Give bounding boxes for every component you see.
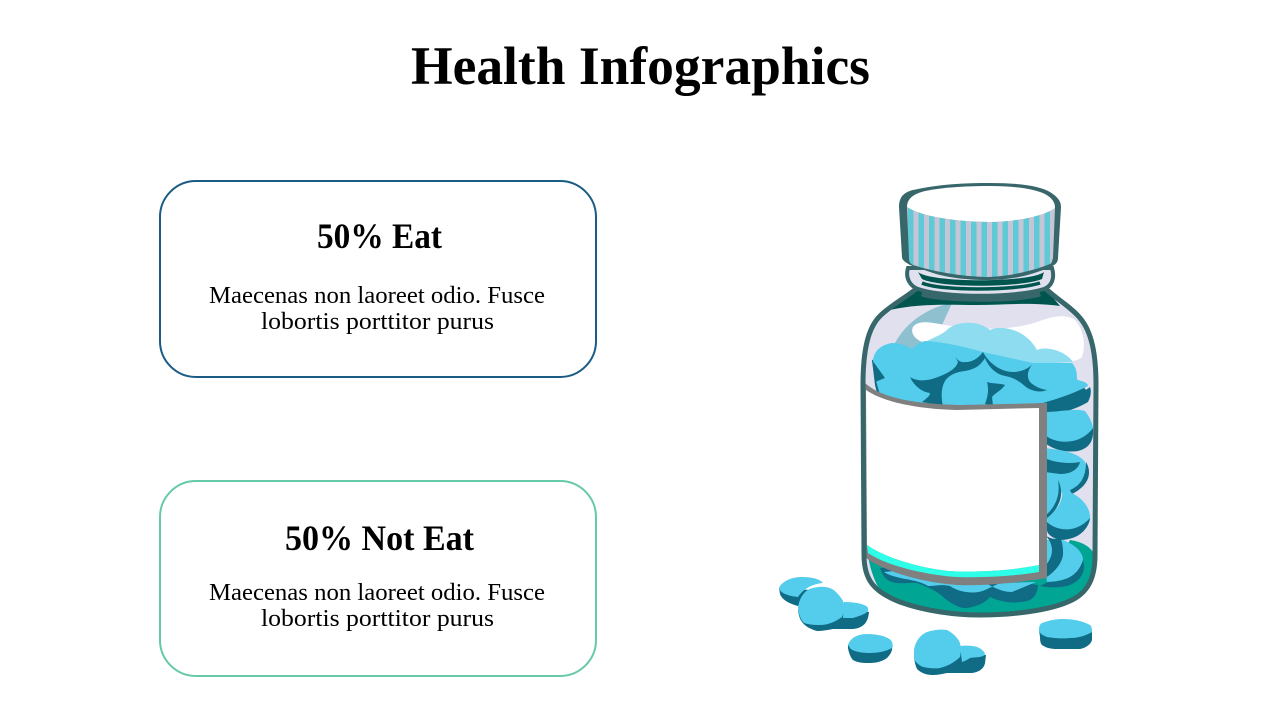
- text block: Eat description: [209, 283, 545, 335]
- text block: Eat description: lobortis porttitor purus: [261, 309, 494, 335]
- text block: Not Eat description: lobortis porttitor purus: [261, 606, 494, 632]
- bottle outline: [863, 289, 1096, 615]
- neck shoulder: [890, 288, 1060, 310]
- text block: Not Eat description: [209, 580, 545, 632]
- neck ring: [907, 268, 1053, 296]
- bottle contents: [866, 303, 1094, 615]
- panel: 50% Not Eat: [160, 481, 596, 676]
- heading: 50% Eat: 50% Eat: [317, 216, 442, 256]
- bottle glass: [863, 289, 1096, 615]
- icon: loose pill right: [1039, 619, 1092, 649]
- icon: loose pills centre pair: [914, 630, 986, 675]
- heading: 50% Not Eat: 50% Not Eat: [285, 518, 474, 558]
- icon: pill bottle: [863, 183, 1096, 615]
- cap: [899, 183, 1061, 280]
- icon: loose pills left pair: [779, 577, 869, 631]
- label: [864, 382, 1047, 585]
- text block: Eat description: Maecenas non laoreet odio. Fusce: [209, 283, 545, 309]
- title: Health Infographics: [411, 36, 870, 96]
- text block: Not Eat description: Maecenas non laoreet odio. Fusce: [209, 580, 545, 606]
- shoulder band: [922, 293, 1040, 298]
- icon: loose pill small: [848, 634, 893, 663]
- panel: 50% Eat: [160, 181, 596, 377]
